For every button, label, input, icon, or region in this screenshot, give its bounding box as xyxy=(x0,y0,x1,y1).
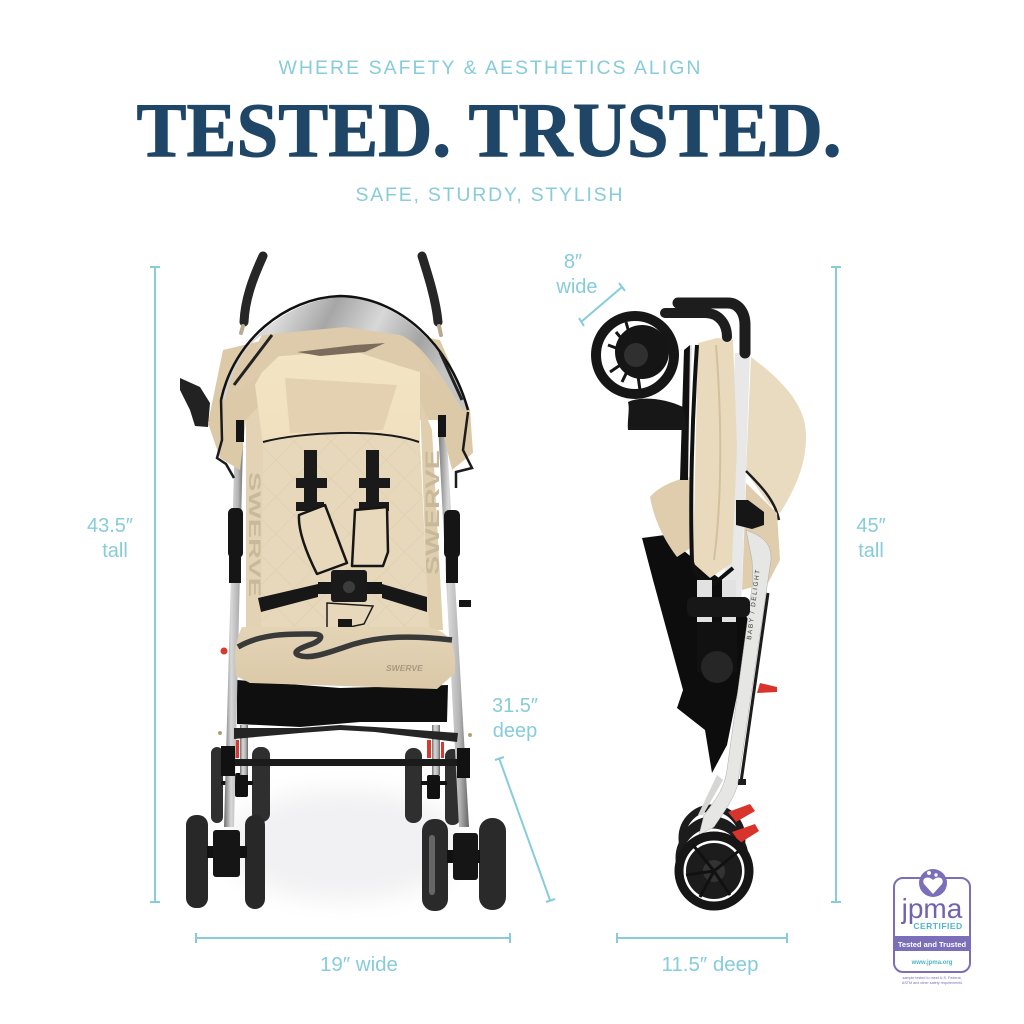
front view stroller xyxy=(180,256,506,911)
title: TESTED. TRUSTED. xyxy=(136,87,842,173)
front piping xyxy=(691,345,733,583)
inner seat headrest area xyxy=(255,350,420,445)
seat piping xyxy=(263,433,419,442)
JPMA certified badge xyxy=(894,869,970,985)
eyebrow heading: WHERE SAFETY & AESTHETICS ALIGN xyxy=(278,57,700,79)
side panels with SWERVE print: SWERVE xyxy=(245,472,264,597)
canopy side fabric xyxy=(208,322,473,470)
label: 31.5 deep: 31.5″ xyxy=(492,695,538,717)
upper handle xyxy=(678,303,745,353)
dimension: front height xyxy=(150,267,160,902)
handles xyxy=(241,256,441,335)
harness straps xyxy=(296,450,390,511)
label: 11.5 deep: 11.5″ deep xyxy=(662,953,758,976)
silver sun canopy xyxy=(223,297,467,410)
tube top xyxy=(723,353,750,610)
side panels with SWERVE print xyxy=(245,400,444,630)
label: 8 wide: wide xyxy=(555,276,598,298)
canopy clips xyxy=(217,400,472,488)
tested band xyxy=(895,936,969,951)
rear canopy xyxy=(746,357,806,513)
label: 45 tall: 45″ xyxy=(856,515,886,537)
quilted seat xyxy=(261,431,429,628)
front left wheels and caster xyxy=(186,815,265,909)
basket xyxy=(237,680,448,727)
clamp on canopy xyxy=(736,500,764,529)
lower fabric xyxy=(742,483,780,590)
crossbars xyxy=(234,725,458,742)
rear canopy piping xyxy=(746,471,779,520)
arm brand text: BABY / DELIGHT xyxy=(746,568,762,640)
side panels with SWERVE print: SWERVE xyxy=(423,450,444,575)
certified text: CERTIFIED xyxy=(913,921,963,931)
canopy underside folds xyxy=(230,326,450,400)
badge outline xyxy=(894,878,970,972)
dimension: front depth xyxy=(495,757,555,902)
basket hub xyxy=(701,651,733,683)
front wheel xyxy=(679,836,749,906)
center black frame xyxy=(680,345,690,480)
swerve stripe xyxy=(238,634,452,657)
label: 43.5 tall: 43.5″ xyxy=(87,515,133,537)
footrest logo: SWERVE xyxy=(386,663,423,673)
footrest cushion xyxy=(235,627,455,689)
crotch pad xyxy=(327,603,373,628)
folded wheel xyxy=(596,316,674,394)
rear silver tubes xyxy=(240,725,440,775)
dimension: folded depth xyxy=(617,933,787,943)
cup holder xyxy=(180,378,210,427)
jpma wordmark: jpma xyxy=(901,893,963,924)
headrest panel xyxy=(285,378,397,433)
red brake levers xyxy=(719,683,777,867)
baby delight arm xyxy=(699,530,771,835)
wheel mount collars xyxy=(221,746,235,776)
frame tubes xyxy=(224,398,244,827)
label: 45 tall: tall xyxy=(858,540,884,562)
front right wheels and caster xyxy=(422,818,506,911)
floor shadow xyxy=(225,790,465,900)
icon: heart in circle xyxy=(919,869,947,897)
buckle xyxy=(331,570,367,602)
shoulder pads xyxy=(299,505,388,574)
cup holder xyxy=(628,399,687,430)
lap belt xyxy=(258,582,427,612)
inner front fabric xyxy=(693,338,737,578)
label: 31.5 deep: deep xyxy=(493,720,537,742)
silver inner strip xyxy=(697,580,736,623)
red rear brakes xyxy=(220,648,444,758)
dimension: folded height xyxy=(831,267,841,902)
dimension: front width xyxy=(196,933,510,943)
strut clamp xyxy=(687,597,750,672)
subtitle: SAFE, STURDY, STYLISH xyxy=(356,184,622,206)
fine print: ASTM and other safety requirements xyxy=(902,981,962,985)
label: 8 wide: 8″ xyxy=(564,251,582,273)
side hinges xyxy=(228,415,471,607)
canopy rim piping xyxy=(221,296,468,410)
dimension: folded width xyxy=(579,283,625,326)
second leg xyxy=(698,775,723,815)
band text: Tested and Trusted xyxy=(898,940,967,949)
seat bulge xyxy=(650,477,692,557)
side bolts xyxy=(218,731,472,737)
basket xyxy=(642,535,748,773)
url: www.jpma.org xyxy=(911,960,953,966)
rear wheels xyxy=(211,747,460,825)
back wheels stack xyxy=(679,808,745,891)
side view folded stroller xyxy=(596,303,806,906)
label: 43.5 tall: tall xyxy=(102,540,128,562)
rear rod xyxy=(741,593,768,782)
fine print: sample tested to meet U.S. Federal, xyxy=(902,976,962,980)
label: 19 wide: 19″ wide xyxy=(320,953,398,976)
lower handle xyxy=(665,313,727,337)
